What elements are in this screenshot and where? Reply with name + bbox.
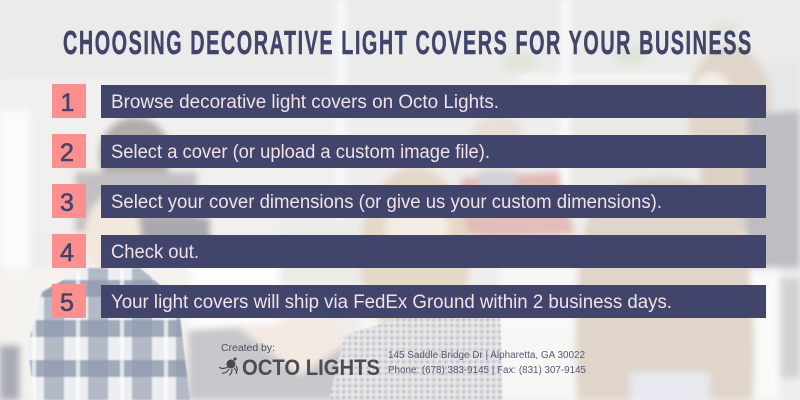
number 4: 4 [60,239,74,267]
step 4 [52,234,766,268]
dress [328,318,503,400]
logo wordmark: OCTO LIGHTS [242,355,380,380]
number 5: 5 [60,289,74,317]
number badge 4 [52,234,86,268]
bar 5 [101,285,766,318]
number 3: 3 [60,189,74,217]
footer credit [219,343,586,380]
number badge 5 [52,284,86,318]
bar 4 [101,235,766,268]
address: 145 Saddle Bridge Dr | Alpharetta, GA 30022 [388,350,585,361]
step 1 text: Browse decorative light covers on Octo Lights. [111,92,499,113]
step 1 [52,84,766,118]
shirt [28,268,190,400]
bar 1 [101,85,766,118]
number badge 3 [52,184,86,218]
phone and fax: Phone: (678) 383-9145 | Fax: (831) 307-9145 [388,365,586,376]
step 3 [52,184,766,218]
step 5 text: Your light covers will ship via FedEx Ground within 2 business days. [111,292,672,313]
icon: octopus logo [219,358,237,375]
bar 2 [101,135,766,168]
number badge 2 [52,134,86,168]
step 5 [52,284,766,318]
step 2 [52,134,766,168]
number badge 1 [52,84,86,118]
step 4 text: Check out. [111,242,199,263]
step 2 text: Select a cover (or upload a custom image file). [111,142,490,163]
title: CHOOSING DECORATIVE LIGHT COVERS FOR YOUR BUSINESS [63,24,751,61]
step 3 text: Select your cover dimensions (or give us your custom dimensions). [111,192,662,213]
number 2: 2 [60,139,74,167]
bar 3 [101,185,766,218]
created by label: Created by: [221,343,275,354]
number 1: 1 [61,89,74,117]
